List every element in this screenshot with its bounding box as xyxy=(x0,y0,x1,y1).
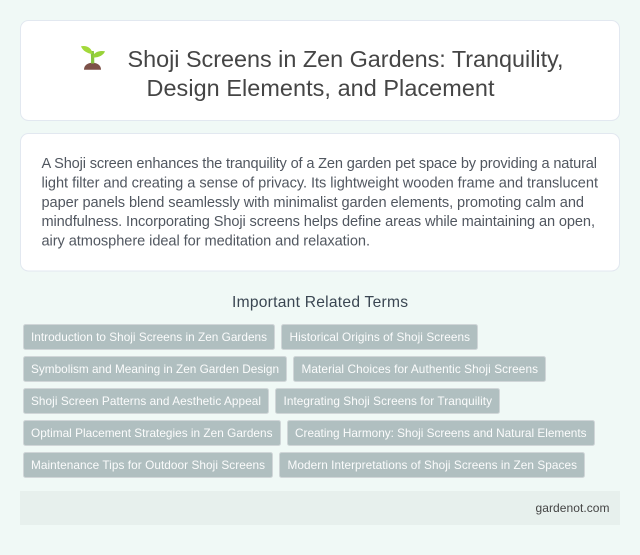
tag xyxy=(276,388,500,414)
heading: related terms: Important Related Terms xyxy=(232,294,408,311)
tag xyxy=(282,324,478,350)
tag: Shoji Screen Patterns and Aesthetic Appeal xyxy=(31,394,261,408)
tag xyxy=(288,420,594,446)
tag: Symbolism and Meaning in Zen Garden Design xyxy=(31,362,279,376)
panel: description card xyxy=(20,134,620,271)
tag: Introduction to Shoji Screens in Zen Gardens xyxy=(31,330,267,344)
tag: Material Choices for Authentic Shoji Screens xyxy=(302,362,538,376)
heading: title: Shoji Screens in Zen Gardens: Tranquility, xyxy=(128,46,564,72)
footer xyxy=(20,491,620,525)
tag xyxy=(24,420,280,446)
tag xyxy=(24,452,272,478)
tag xyxy=(24,356,286,382)
text block: description: A Shoji screen enhances the tranquility of a Zen garden pet space by providing a natural xyxy=(42,156,597,172)
tags: related terms xyxy=(24,324,594,478)
text block: description: paper panels blend seamlessly with minimalist garden elements, promoting calm and xyxy=(42,195,584,211)
panel: title card xyxy=(20,20,620,120)
heading: title: Design Elements, and Placement xyxy=(146,75,495,101)
tag: Creating Harmony: Shoji Screens and Natural Elements xyxy=(295,426,587,440)
icon: sprout xyxy=(81,46,105,70)
tag xyxy=(24,388,268,414)
text block: description: light filter and creating a sense of privacy. Its lightweight wooden frame and translucent xyxy=(42,176,598,192)
tag: Integrating Shoji Screens for Tranquility xyxy=(284,394,492,408)
tag xyxy=(294,356,546,382)
tag xyxy=(24,324,274,350)
text block: description: airy atmosphere ideal for meditation and relaxation. xyxy=(42,234,370,250)
tag: Modern Interpretations of Shoji Screens in Zen Spaces xyxy=(288,458,577,472)
text block: description: mindfulness. Incorporating Shoji screens helps define areas while maintaining an open, xyxy=(42,214,595,230)
tag: Optimal Placement Strategies in Zen Gardens xyxy=(31,426,273,440)
tag: Historical Origins of Shoji Screens xyxy=(290,330,470,344)
footer: gardenot.com xyxy=(536,501,610,515)
tag xyxy=(280,452,584,478)
text block: description xyxy=(42,156,598,250)
heading: title xyxy=(128,46,564,101)
tag: Maintenance Tips for Outdoor Shoji Screens xyxy=(31,458,265,472)
